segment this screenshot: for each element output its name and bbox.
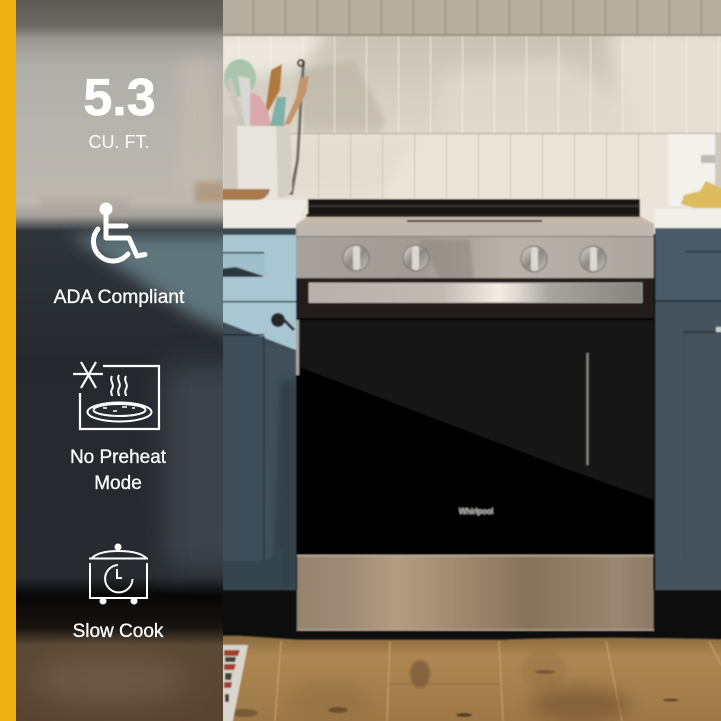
left cabinet — [210, 228, 296, 590]
cooktop — [296, 199, 654, 224]
label: ADA Compliant — [54, 287, 185, 308]
label: Slow Cook — [73, 621, 164, 642]
capacity unit: CU. FT. — [88, 132, 150, 152]
icon: oven with steam and dish — [73, 362, 159, 429]
feature: capacity — [83, 69, 156, 152]
oven door — [296, 278, 654, 556]
photo: kitchen scene with range — [210, 0, 721, 721]
frosted background — [16, 0, 223, 721]
label: No Preheat — [70, 447, 167, 468]
feature: no preheat — [70, 362, 167, 494]
storage drawer — [297, 555, 654, 630]
utensil crock — [223, 58, 310, 201]
control panel — [296, 224, 654, 278]
countertops — [210, 200, 721, 228]
feature: ADA compliant — [54, 202, 185, 308]
outlet and towel — [668, 134, 721, 208]
rug — [223, 644, 249, 721]
accent bar — [0, 0, 16, 721]
label second line: Mode — [94, 473, 142, 494]
right cabinet — [655, 228, 721, 590]
panel: frosted feature sidebar — [0, 0, 223, 721]
brand logo: Whirlpool — [459, 507, 493, 516]
tile wall — [210, 0, 721, 234]
range — [296, 199, 654, 630]
icon: wheelchair — [93, 202, 145, 261]
door handle — [309, 283, 642, 302]
feature: slow cook — [73, 544, 164, 642]
floor and toe kick — [210, 590, 721, 721]
oven knobs — [343, 245, 606, 272]
capacity value: 5.3 — [83, 69, 156, 127]
icon: slow cooker — [89, 544, 148, 604]
